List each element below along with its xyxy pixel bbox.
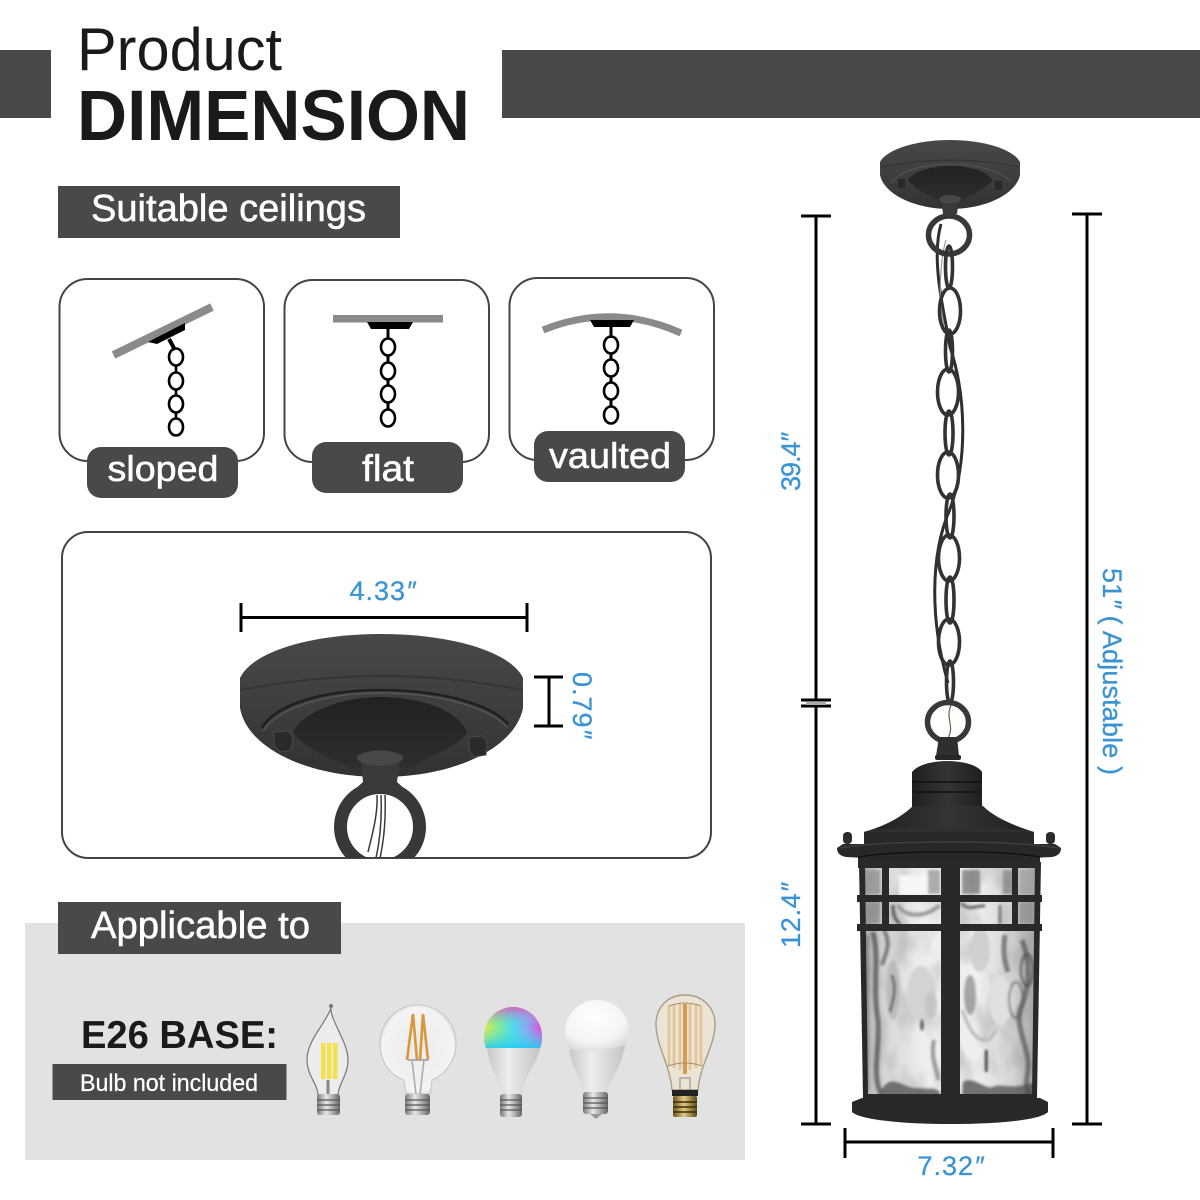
icon: colour smart bulb: [484, 1007, 542, 1117]
left pane: [907, 966, 932, 1020]
label: sloped: [87, 447, 238, 498]
dimension: lantern height: [776, 702, 831, 1124]
dimension: chain length: [776, 216, 831, 700]
dimension: canopy width: 4.33″: [349, 576, 417, 606]
right pane: [964, 975, 976, 1015]
label: vaulted: vaulted: [549, 435, 671, 476]
note: bulb not included: Bulb not included: [80, 1070, 258, 1097]
note: bulb not included: [52, 1064, 286, 1100]
dimension: canopy height: [534, 672, 597, 740]
label: sloped: sloped: [108, 448, 218, 489]
canopy close-up: [240, 634, 523, 866]
dimension: lantern height: 12.4″: [776, 882, 806, 948]
title: [77, 16, 470, 156]
dimension: canopy height: 0.79 ″: [567, 672, 597, 740]
label: flat: [312, 442, 463, 493]
lantern frame: [857, 855, 1042, 1100]
heading: suitable ceilings: [58, 186, 400, 238]
canopy: [880, 140, 1020, 214]
dimension: total height: [1072, 214, 1127, 1124]
icon: sloped ceiling and chain: [114, 307, 212, 436]
lantern cap: [864, 737, 1034, 832]
label: flat: flat: [362, 448, 415, 489]
icon: white bulb: [565, 1000, 629, 1119]
lantern glass: [860, 866, 1040, 1100]
text: E26 base: E26 BASE:: [81, 1014, 278, 1057]
panel: vaulted ceiling: [510, 278, 714, 482]
heading: applicable to: Applicable to: [91, 905, 310, 947]
panel: canopy detail: [62, 532, 711, 866]
dimension: lantern width: [845, 1128, 1053, 1181]
icon: candle bulb: [307, 1004, 348, 1115]
icon: vaulted ceiling and chain: [543, 317, 681, 424]
icon: edison bulb: [656, 995, 715, 1117]
dimension: canopy width: [241, 576, 527, 632]
dimension: lantern width: 7.32″: [917, 1151, 985, 1181]
heading: applicable to: [58, 902, 341, 954]
product: pendant lantern: [837, 140, 1061, 1124]
lantern base: [852, 1098, 1048, 1124]
header bar: left: [0, 50, 51, 118]
title: Product: [77, 16, 282, 83]
header bar: right: [502, 50, 1200, 118]
panel: applicable bulbs: [25, 902, 745, 1160]
lantern brim: [837, 828, 1061, 859]
title: DIMENSION: [77, 77, 470, 156]
panel: flat ceiling: [284, 280, 489, 493]
dimension: chain length: 39.4″: [776, 432, 806, 491]
chain and wire: [928, 216, 970, 742]
heading: suitable ceilings: Suitable ceilings: [91, 188, 366, 230]
ring: [340, 788, 420, 866]
panel: sloped ceiling: [60, 279, 264, 498]
icon: flat ceiling and chain: [333, 315, 443, 426]
bolts: [274, 731, 487, 757]
icon: globe bulb: [380, 1005, 456, 1115]
dimension: total height: 51 ″ ( Adjustable ): [1097, 568, 1127, 775]
label: vaulted: [534, 431, 685, 482]
